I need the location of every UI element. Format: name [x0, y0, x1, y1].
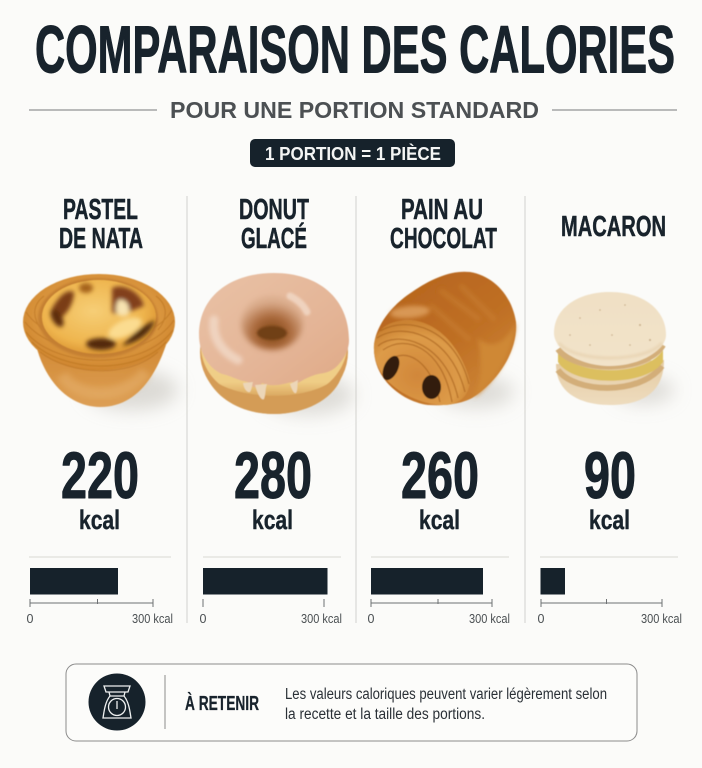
heading: pastel de nata: PASTEL — [63, 194, 138, 226]
value: 280 kcal: kcal — [252, 505, 293, 535]
icon: kitchen scale — [88, 674, 146, 730]
note text: Les valeurs caloriques peuvent varier légèrement selon — [285, 686, 607, 703]
heading: donut glace — [239, 194, 309, 255]
icon: macaron — [554, 292, 674, 405]
heading: donut glace: GLACÉ — [241, 221, 307, 255]
value: 260 kcal: 260 — [401, 438, 479, 512]
subtitle with rules: POUR UNE PORTION STANDARD — [170, 97, 539, 123]
note text: la recette et la taille des portions. — [285, 706, 485, 723]
bar chart: 220 of 300: 0 — [27, 612, 34, 626]
note text — [285, 686, 607, 723]
bar chart: 90 of 300: 300 kcal — [641, 612, 682, 626]
bar chart: 280 of 300: 0 — [200, 612, 207, 626]
bar chart: 220 of 300: 300 kcal — [132, 612, 173, 626]
bar chart: 260 of 300 — [368, 557, 510, 626]
value: 280 kcal — [234, 438, 312, 535]
icon: pastel de nata — [23, 274, 178, 410]
bar chart: 260 of 300: 0 — [368, 612, 375, 626]
badge: 1 portion = 1 piece: 1 PORTION = 1 PIÈCE — [265, 143, 441, 164]
bar chart: 90 of 300: 0 — [538, 612, 545, 626]
value: 90 kcal — [584, 438, 636, 535]
value: 90 kcal: 90 — [584, 438, 636, 512]
callout: a retenir — [66, 664, 637, 741]
value: 220 kcal — [61, 438, 139, 535]
heading: pastel de nata: DE NATA — [59, 223, 143, 255]
bar chart: 260 of 300: 300 kcal — [469, 612, 510, 626]
icon: pain au chocolat — [374, 272, 516, 408]
heading: pain au chocolat — [390, 194, 497, 255]
panel: donut glace — [199, 194, 354, 626]
badge: 1 portion = 1 piece — [250, 139, 455, 167]
bar chart: 280 of 300 — [200, 557, 342, 626]
value: 260 kcal — [401, 438, 479, 535]
bar chart: 280 of 300: 300 kcal — [301, 612, 342, 626]
label: a retenir: À RETENIR — [185, 692, 259, 715]
heading: pain au chocolat: PAIN AU — [401, 194, 483, 226]
value: 220 kcal: kcal — [79, 505, 120, 535]
bar chart: 90 of 300 — [538, 557, 682, 626]
bar chart: 220 of 300 — [27, 557, 173, 626]
panel: pain au chocolat — [368, 194, 516, 626]
value: 260 kcal: kcal — [419, 505, 460, 535]
panel: macaron — [538, 211, 682, 626]
heading: donut glace: DONUT — [239, 194, 309, 226]
panel: pastel de nata — [23, 194, 178, 626]
heading: pastel de nata — [59, 194, 143, 255]
value: 220 kcal: 220 — [61, 438, 139, 512]
heading: pain au chocolat: CHOCOLAT — [390, 223, 497, 255]
value: 90 kcal: kcal — [589, 505, 630, 535]
value: 280 kcal: 280 — [234, 438, 312, 512]
icon: donut — [199, 273, 354, 415]
